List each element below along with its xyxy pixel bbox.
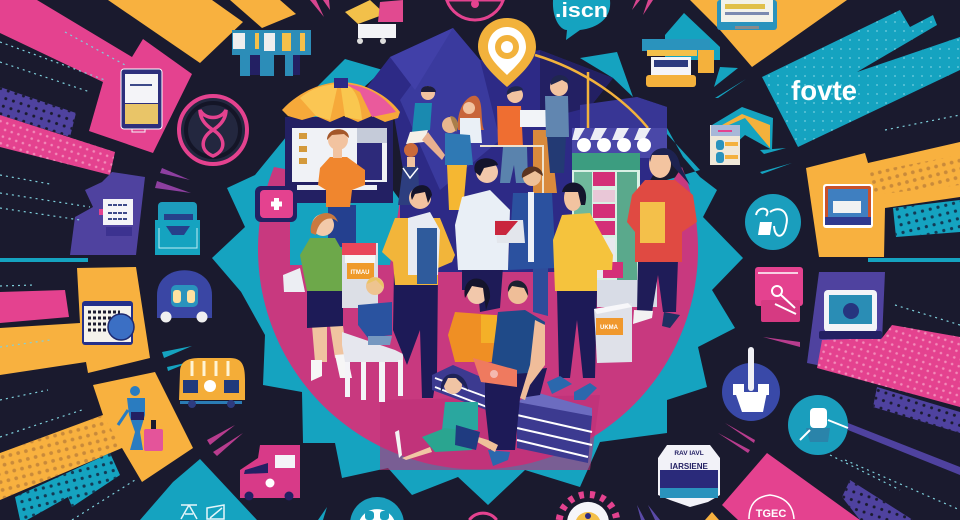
icon: laptop on yellow (823, 184, 873, 228)
icon: left tablet (121, 69, 162, 132)
icon: bottom pink ring (469, 513, 497, 520)
icon: bottom teal circle (350, 497, 404, 520)
speech bubble label: .iscn (555, 0, 608, 22)
person: seated girl (395, 374, 498, 460)
white box kiosk: UKMA (600, 325, 619, 331)
icon: yellow awning bus (179, 358, 245, 408)
mountain backdrop (367, 28, 667, 270)
icon: traveller with luggage (118, 386, 163, 451)
badge icon: IARSIENE (670, 462, 709, 471)
storefront board (572, 128, 667, 307)
yellow arc connector (535, 55, 648, 130)
icon: flower circle (559, 494, 617, 520)
accent spikes (155, 0, 800, 520)
person: green shirt woman (283, 213, 352, 381)
pink circular label: TGEC (756, 508, 786, 520)
panel: central teal gear (212, 52, 743, 505)
icon: pink ring top (447, 0, 503, 20)
icon: top shop (232, 30, 311, 76)
person: orange shirt woman (448, 278, 497, 362)
person: orange shirt man (318, 129, 365, 247)
badge icon: RAV IAVL (674, 450, 704, 457)
kiosk terminal (342, 243, 378, 308)
panel: left burst shapes (0, 0, 296, 520)
booth with umbrella (282, 78, 400, 203)
person: top group (398, 75, 569, 210)
icon: blue circle with plug (722, 350, 780, 421)
pink circular floor (258, 167, 698, 470)
person: yellow jacket man (382, 185, 455, 398)
icon: pink medical badge (255, 186, 297, 222)
white chair with seated child (342, 277, 403, 402)
icon: teal printer (155, 202, 200, 255)
icon: top right tablet (717, 0, 777, 30)
icon: house (710, 107, 773, 165)
frame behind center (480, 146, 543, 215)
icon: location pin (478, 18, 536, 87)
person: yellow shirt man (547, 182, 613, 400)
brand label fovte: fovte (791, 75, 857, 106)
icon: calendar (82, 301, 134, 345)
icon: teal circle with figure (788, 395, 848, 455)
person: blue jacket man (508, 166, 556, 316)
speech bubble label (553, 0, 610, 40)
pink circular label (749, 495, 794, 520)
person: seated man with laptop (473, 280, 547, 466)
icon: hangers (181, 505, 224, 519)
icon: pink panel with magnifier (755, 267, 803, 322)
icon: teal circle (745, 194, 801, 250)
panel: right burst shapes (690, 0, 960, 520)
striped bench (432, 365, 592, 463)
icon: pink ring emblem (179, 96, 247, 164)
person: white coat man (455, 158, 525, 312)
person: red shirt man (627, 148, 697, 328)
icon: document on purple (99, 199, 133, 236)
icon: blue round bus (157, 270, 212, 322)
icon: laptop on purple (819, 290, 882, 339)
white box kiosk (594, 303, 632, 363)
icon: pink bus (240, 445, 300, 500)
icon: shopping cart (345, 0, 403, 44)
kiosk terminal: ITMAU (350, 270, 370, 276)
badge icon (658, 445, 720, 507)
icon: top right bus shop (642, 13, 720, 87)
